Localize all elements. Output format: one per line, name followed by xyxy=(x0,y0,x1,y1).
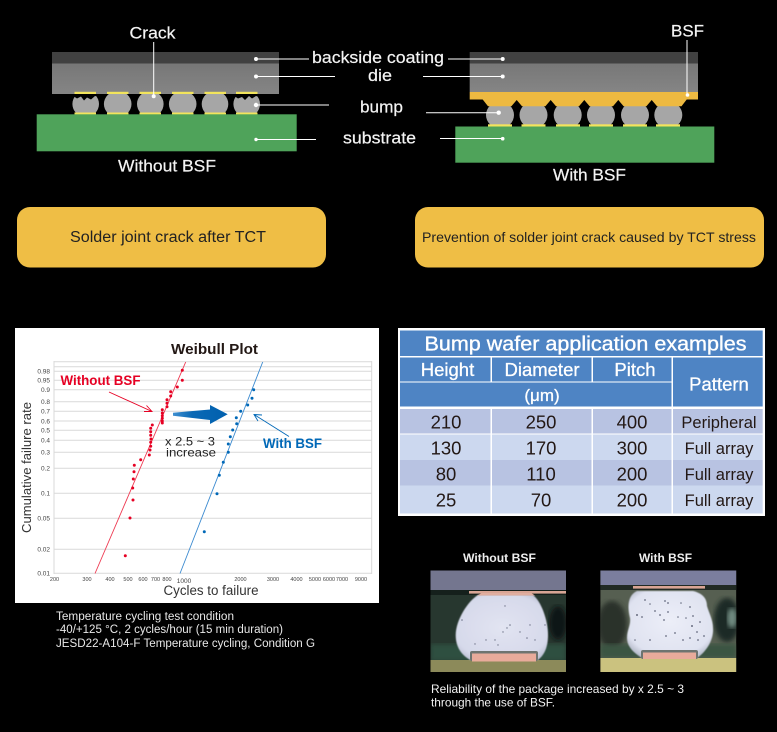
x axis labels: 9000 xyxy=(355,577,367,583)
label: x 2.5 ~ 3 increase xyxy=(165,434,216,460)
y axis labels: 0.7 xyxy=(41,408,50,416)
y axis labels: 0.2 xyxy=(41,466,50,472)
yellow pads xyxy=(488,124,680,127)
label: Without BSF: Without BSF xyxy=(60,373,140,388)
table values xyxy=(431,412,757,510)
reliability note: Reliability of the package increased by x 2.5 ~ 3 xyxy=(431,682,684,696)
data points: with BSF xyxy=(203,388,255,533)
table values: Full array xyxy=(685,466,754,484)
table rows xyxy=(400,409,763,486)
cracks xyxy=(74,94,259,100)
y axis labels: 0.3 xyxy=(41,450,50,456)
test condition note: Temperature cycling test condition xyxy=(56,611,234,623)
photo: cross-section with BSF xyxy=(597,570,740,672)
callout: prevention of crack xyxy=(415,207,764,268)
heading: photo without BSF: Without BSF xyxy=(463,553,536,565)
label: BSF: BSF xyxy=(671,22,704,40)
y axis labels: 0.02 xyxy=(37,546,50,554)
x axis labels: 200 xyxy=(50,577,59,583)
test condition note xyxy=(56,611,315,650)
diagram: without BSF xyxy=(37,52,297,151)
pointer: with BSF xyxy=(254,414,289,436)
reliability note xyxy=(431,682,684,710)
bumps xyxy=(486,106,682,124)
table values: 130 xyxy=(431,438,461,458)
label: x 2.5 ~ 3 increase: x 2.5 ~ 3 xyxy=(165,434,215,448)
table values: 70 xyxy=(531,490,551,510)
y axis labels: 0.1 xyxy=(41,490,50,498)
x axis labels: 3000 xyxy=(267,577,279,583)
column headers: Height xyxy=(421,359,474,380)
callout: prevention of crack: Prevention of solder joint crack caused by TCT stress xyxy=(422,229,756,245)
table values: 200 xyxy=(617,490,647,510)
table values: Peripheral xyxy=(681,414,757,432)
y axis labels xyxy=(37,368,50,578)
label: Without BSF: Without BSF xyxy=(118,156,216,176)
x axis title: Cycles to failure xyxy=(164,583,258,598)
substrate layer xyxy=(455,126,714,163)
chart: Weibull plot xyxy=(15,328,379,603)
die layer xyxy=(470,64,698,92)
x axis labels: 500 xyxy=(123,577,133,583)
callout: solder joint crack xyxy=(17,207,326,268)
table values: 200 xyxy=(617,464,647,484)
backside coating layer xyxy=(470,52,698,64)
label: bump: bump xyxy=(360,98,403,116)
label: Crack: Crack xyxy=(130,24,176,42)
table values: Full array xyxy=(685,440,754,458)
label: backside coating: backside coating xyxy=(312,48,444,67)
table values: 25 xyxy=(436,490,456,510)
y axis title: Cumulative failure rate xyxy=(19,402,34,533)
heading: photo with BSF: With BSF xyxy=(639,553,692,565)
die layer xyxy=(52,64,279,94)
label: substrate: substrate xyxy=(343,128,416,148)
backside coating layer xyxy=(52,52,279,64)
callout: solder joint crack: Solder joint crack after TCT xyxy=(70,229,267,246)
x axis labels: 6000 xyxy=(323,577,335,583)
table values: 80 xyxy=(436,464,456,484)
label: die: die xyxy=(368,66,392,85)
x axis labels: 7000 xyxy=(336,577,348,583)
substrate layer xyxy=(37,114,297,151)
table header xyxy=(400,330,763,406)
diagram: with BSF xyxy=(455,52,714,163)
table values: 210 xyxy=(431,412,461,432)
x axis labels: 5000 xyxy=(309,577,321,583)
arrow: improvement xyxy=(173,405,228,424)
table values: 300 xyxy=(617,438,647,458)
data points: without BSF xyxy=(124,369,184,557)
grid xyxy=(54,361,372,574)
table values: 250 xyxy=(526,412,556,432)
pointer: without BSF xyxy=(109,392,152,412)
column headers: (μm) xyxy=(524,386,560,405)
test condition note: -40/+125 °C, 2 cycles/hour (15 min duration) xyxy=(56,624,283,636)
label: With BSF: With BSF xyxy=(553,166,626,184)
x axis labels: 800 xyxy=(162,577,172,583)
table: bump wafer application examples xyxy=(398,328,765,516)
column headers: Diameter xyxy=(504,359,580,380)
label: With BSF: With BSF xyxy=(263,436,322,451)
x axis labels: 2000 xyxy=(234,577,247,583)
x axis labels xyxy=(50,577,367,585)
y axis labels: 0.5 xyxy=(41,428,50,434)
table title: Bump wafer application examples xyxy=(424,334,746,356)
y axis labels: 0.01 xyxy=(37,570,50,578)
y axis labels: 0.6 xyxy=(41,418,50,426)
table values: 400 xyxy=(617,412,647,432)
y axis labels: 0.8 xyxy=(41,399,50,406)
leader lines and labels xyxy=(118,22,704,184)
trend line: without BSF xyxy=(95,362,186,574)
x axis labels: 600 xyxy=(138,577,148,583)
column headers: Pattern xyxy=(689,374,749,394)
table values: 170 xyxy=(526,438,556,458)
y axis labels: 0.05 xyxy=(37,516,50,522)
BSF underfill xyxy=(470,92,698,106)
bumps xyxy=(72,94,260,112)
x axis labels: 700 xyxy=(151,577,160,583)
y axis labels: 0.9 xyxy=(41,387,50,394)
label: x 2.5 ~ 3 increase: increase xyxy=(166,446,216,460)
x axis labels: 400 xyxy=(105,577,115,583)
table values: 110 xyxy=(526,464,556,484)
photo: cross-section without BSF xyxy=(430,570,567,672)
column headers xyxy=(421,359,749,405)
chart title: Weibull Plot xyxy=(171,341,258,358)
y axis labels: 0.98 xyxy=(37,368,50,376)
column headers: Pitch xyxy=(614,359,656,380)
table values: Full array xyxy=(685,492,754,510)
x axis labels: 300 xyxy=(82,577,92,583)
x axis labels: 4000 xyxy=(290,577,303,583)
y axis labels: 0.95 xyxy=(37,378,50,384)
test condition note: JESD22-A104-F Temperature cycling, Condition G xyxy=(56,638,315,650)
trend line: with BSF xyxy=(180,362,263,574)
reliability note: through the use of BSF. xyxy=(431,696,555,710)
yellow pads xyxy=(74,92,258,115)
y axis labels: 0.4 xyxy=(41,438,50,444)
x axis labels: 1000 xyxy=(177,578,192,585)
